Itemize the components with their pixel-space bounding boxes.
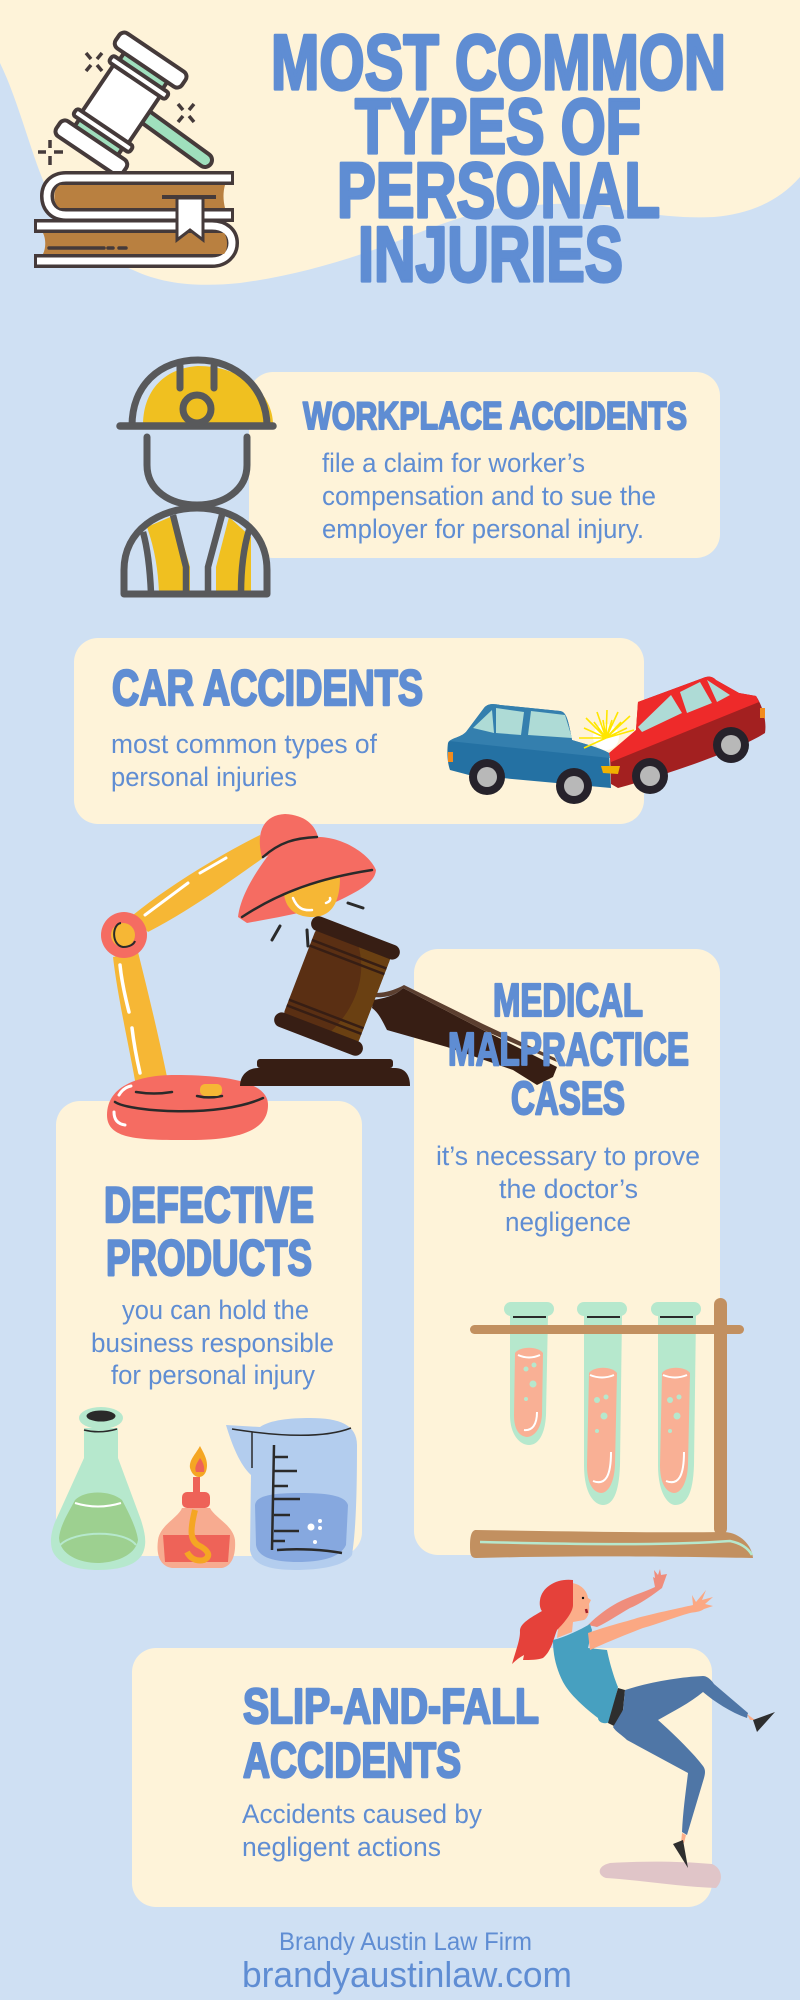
illustration: alcohol burner xyxy=(158,1446,235,1568)
illustration: brown gavel xyxy=(240,914,557,1086)
title xyxy=(271,18,726,298)
footer: firm name and website: brandyaustinlaw.com xyxy=(242,1954,572,1995)
panel: car accidents: personal injuries xyxy=(111,762,297,792)
text: defective products: PRODUCTS xyxy=(106,1230,312,1286)
panel: workplace accidents: WORKPLACE ACCIDENTS xyxy=(303,395,687,438)
test tube 3 xyxy=(651,1302,701,1505)
title: TYPES OF xyxy=(355,82,641,170)
text: defective products: you can hold the xyxy=(122,1295,309,1325)
footer: firm name and website: Brandy Austin Law Firm xyxy=(279,1928,532,1956)
panel: workplace accidents: compensation and to sue the xyxy=(322,481,656,511)
text: medical malpractice cases: negligence xyxy=(505,1207,631,1237)
illustration: desk lamp xyxy=(101,814,376,1140)
icon: gavel on books xyxy=(34,30,234,261)
title: PERSONAL xyxy=(337,146,660,234)
text: defective products xyxy=(91,1177,334,1390)
panel: defective products card xyxy=(56,1101,362,1556)
panel: slip-and-fall accidents: Accidents caused by xyxy=(242,1799,482,1829)
panel: car accidents: CAR ACCIDENTS xyxy=(112,660,423,716)
panel: workplace accidents: file a claim for worker’s xyxy=(322,448,585,478)
text: medical malpractice cases xyxy=(436,974,700,1237)
icon: car crash xyxy=(447,677,765,804)
illustration: measuring beaker xyxy=(226,1418,357,1570)
panel: medical malpractice card xyxy=(414,949,720,1555)
panel: workplace accidents xyxy=(249,372,720,558)
panel: slip-and-fall accidents xyxy=(132,1648,712,1907)
panel: slip-and-fall accidents: ACCIDENTS xyxy=(243,1734,461,1788)
illustration: lab flask xyxy=(51,1407,145,1570)
text: medical malpractice cases: CASES xyxy=(511,1072,625,1124)
text: medical malpractice cases: MEDICAL xyxy=(493,974,643,1026)
panel: slip-and-fall accidents: negligent actions xyxy=(242,1832,441,1862)
impact spark xyxy=(579,710,634,750)
illustration: test tube rack xyxy=(470,1298,753,1558)
red car xyxy=(601,677,765,794)
footer: firm name and website xyxy=(242,1928,572,1995)
test tube 1 xyxy=(504,1302,554,1445)
text: medical malpractice cases: the doctor’s xyxy=(499,1174,638,1204)
text: medical malpractice cases: it’s necessary to prove xyxy=(436,1141,700,1171)
panel: slip-and-fall accidents: SLIP-AND-FALL xyxy=(243,1680,539,1734)
text: defective products: business responsible xyxy=(91,1328,334,1358)
blue car xyxy=(447,704,611,804)
text: defective products: for personal injury xyxy=(111,1360,315,1390)
illustration: falling woman xyxy=(512,1569,775,1888)
text: defective products: DEFECTIVE xyxy=(104,1177,314,1233)
icon: construction worker xyxy=(120,360,273,594)
text: medical malpractice cases: MALPRACTICE xyxy=(448,1023,689,1075)
panel: car accidents xyxy=(74,638,644,824)
panel: car accidents: most common types of xyxy=(111,729,377,759)
test tube 2 xyxy=(577,1302,627,1505)
title: INJURIES xyxy=(358,210,623,298)
panel: workplace accidents: employer for personal injury. xyxy=(322,514,644,544)
